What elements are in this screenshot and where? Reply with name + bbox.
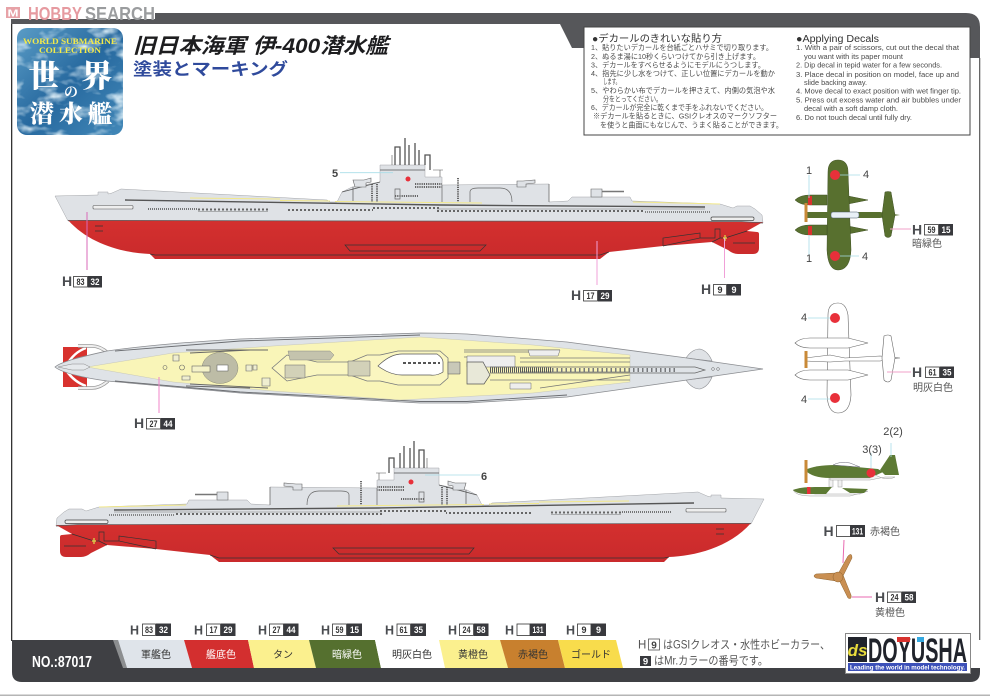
note on colour codes: 9 — [643, 656, 648, 668]
swatch: 明灰白色 — [375, 640, 445, 668]
series name in English: WORLD SUBMARINE — [23, 36, 117, 46]
English decal instructions: 3. Place decal in position on model, face up and — [796, 70, 959, 79]
callouts on floatplane: 2(2) — [883, 426, 903, 438]
colour name: 赤褐色 — [870, 526, 900, 538]
callouts on grey aircraft — [801, 312, 807, 406]
colour code H17 29: 17 — [586, 291, 594, 301]
code 83 32: 83 — [145, 625, 153, 635]
code 17 29: 29 — [224, 625, 232, 635]
swatch: 黄橙色 — [439, 640, 508, 668]
aft deck fittings — [464, 350, 630, 388]
bow planes — [686, 349, 712, 389]
code 59 15: 15 — [350, 625, 359, 635]
Japanese decal instructions: 5、やわらかい布でデカールを押さえて、内側の気泡や水 — [591, 86, 776, 95]
product number: NO.:87017 — [32, 654, 92, 671]
submarine top view — [55, 333, 763, 403]
subtitle: 塗装とマーキング — [133, 59, 288, 79]
colour code H17 29: 29 — [600, 291, 610, 301]
leader: propeller colour — [724, 238, 726, 278]
callouts on floatplane — [862, 426, 903, 456]
colour code H9 9: 9 — [731, 285, 737, 295]
callout 5 — [332, 168, 393, 180]
code 24 58 — [448, 624, 488, 638]
colour code H131: H — [824, 523, 834, 539]
series name in Japanese: 水 — [59, 101, 83, 128]
leader: deck colour — [158, 377, 160, 413]
colour code H61 35: 35 — [942, 368, 952, 378]
Japanese decal instructions: します。 — [603, 77, 620, 86]
callouts on green aircraft: 1 — [806, 253, 812, 265]
code 17 29: 17 — [210, 625, 218, 635]
code 9 9: 9 — [596, 625, 601, 635]
colour code H59 15 — [912, 222, 953, 238]
code 9 9: H — [566, 624, 575, 638]
colour code H17 29 — [571, 287, 612, 303]
English decal instructions: 1. With a pair of scissors, cut out the decal that — [796, 43, 959, 52]
Japanese decal instructions: 2、ぬるま湯に10秒くらいつけてから引き上げます。 — [591, 52, 760, 61]
code 17 29 — [194, 624, 236, 638]
code 27 44: 27 — [272, 625, 280, 635]
Doyusha logo: Leading the world in model technology. — [850, 664, 965, 672]
Japanese decal instructions: 分をとってください。 — [603, 94, 662, 104]
colour code H83 32 — [62, 273, 102, 289]
English decal instructions: slide backing away. — [804, 78, 867, 87]
callout 6: 6 — [481, 471, 487, 483]
code 27 44: 44 — [286, 625, 296, 635]
code 24 58: 24 — [462, 625, 470, 635]
series badge: World Submarine Collection — [17, 28, 123, 135]
code 61 35: 35 — [414, 625, 423, 635]
colour name: 明灰白色 — [913, 381, 953, 394]
code 17 29: H — [194, 624, 203, 638]
colour code H61 35: H — [912, 364, 922, 380]
swatch: 軍艦色 — [118, 640, 192, 668]
note on colour codes: はGSIクレオス・水性ホビーカラー、 — [663, 638, 830, 652]
swatch: タン: タン — [273, 649, 293, 661]
English decal instructions: you want with its paper mount — [804, 52, 903, 61]
colour name: 黄橙色 — [875, 606, 905, 619]
code 27 44: H — [258, 624, 267, 638]
Japanese decal instructions: を使うと曲面にもなじんで、うまく貼ることができます。 — [600, 120, 783, 130]
colour code H83 32: 83 — [76, 277, 84, 287]
swatch: 赤褐色: 赤褐色 — [518, 649, 548, 661]
Japanese decal instructions: 1、貼りたいデカールを台紙ごとハサミで切り取ります。 — [591, 43, 773, 52]
series name in English — [23, 36, 117, 55]
colour code H27 44: 44 — [164, 419, 172, 429]
note on colour codes — [638, 638, 830, 668]
Japanese decal instructions: 6、デカールが完全に乾くまで手をふれないでください。 — [591, 103, 768, 112]
code 59 15: H — [321, 624, 330, 638]
swatch: 明灰白色: 明灰白色 — [392, 648, 432, 661]
callouts on floatplane: 3(3) — [862, 444, 882, 456]
English decal instructions: decal with a soft damp cloth. — [804, 104, 898, 113]
colour name: 暗緑色 — [912, 237, 942, 250]
series name in Japanese — [28, 59, 112, 128]
Japanese decal instructions — [591, 32, 783, 130]
English decal instructions: 2. Dip decal in tepid water for a few seconds. — [796, 60, 942, 70]
page edge line — [0, 694, 990, 696]
colour code row — [130, 624, 606, 638]
hull outline — [55, 333, 763, 403]
stern centre fairing — [58, 364, 90, 370]
note on colour codes: はMr.カラーの番号です。 — [654, 654, 768, 668]
series name in Japanese: 界 — [82, 59, 112, 94]
stern planes — [63, 346, 108, 388]
swatch: 赤褐色 — [500, 640, 565, 668]
colour code H17 29: H — [571, 287, 581, 303]
code 59 15 — [321, 624, 362, 638]
submarine side view, port — [55, 138, 763, 259]
swatch: 艦底色: 艦底色 — [206, 648, 236, 661]
leader: light grey — [887, 371, 911, 373]
code 83 32: 32 — [159, 625, 168, 635]
colour code H83 32: H — [62, 273, 72, 289]
note on colour codes: 9 — [651, 640, 657, 652]
callouts on green aircraft: 4 — [863, 169, 869, 181]
colour code H61 35: 61 — [928, 368, 936, 378]
swatch: 黄橙色: 黄橙色 — [458, 648, 488, 661]
colour code H27 44: H — [134, 415, 144, 431]
colour code H24 58: 58 — [904, 592, 914, 602]
series name in Japanese: 艦 — [88, 101, 112, 128]
hinomaru — [406, 176, 410, 182]
series name in Japanese: の — [64, 86, 78, 101]
forward gun ring — [192, 352, 238, 384]
code 83 32 — [130, 624, 171, 638]
Doyusha logo — [846, 632, 970, 674]
callout 6 — [425, 471, 487, 483]
colour code H27 44: 27 — [150, 419, 158, 429]
centre rail — [490, 368, 552, 372]
colour code H131: 131 — [852, 526, 863, 536]
code 61 35: 61 — [400, 625, 408, 635]
Japanese decal instructions: ●デカールのきれいな貼り方 — [592, 32, 722, 45]
panel: decal instructions — [584, 27, 970, 135]
Japanese decal instructions: 4、指先に少し水をつけて、正しい位置にデカールを動か — [591, 69, 776, 78]
fore deck fittings — [173, 355, 270, 386]
colour code H24 58 — [875, 589, 916, 605]
callouts on green aircraft — [806, 165, 869, 265]
watermark logo: Hobby Search — [6, 4, 155, 24]
colour code H9 9: 9 — [717, 285, 723, 295]
code 24 58: 58 — [476, 625, 486, 635]
series name in Japanese: 潜 — [30, 101, 54, 128]
colour code H9 9 — [701, 281, 741, 297]
callouts on grey aircraft: 4 — [801, 312, 807, 324]
aircraft: dark green top view — [795, 160, 900, 270]
swatch: 暗緑色 — [309, 640, 381, 668]
colour code H27 44 — [134, 415, 175, 431]
callouts on green aircraft: 4 — [862, 251, 868, 263]
leader: dark green — [890, 228, 911, 230]
colour code H61 35 — [912, 364, 954, 380]
callouts on grey aircraft: 4 — [801, 394, 807, 406]
swatch: タン — [248, 640, 316, 668]
swatch: 暗緑色: 暗緑色 — [332, 648, 362, 661]
colour code H83 32: 32 — [90, 277, 100, 287]
code 24 58: H — [448, 624, 457, 638]
Doyusha logo: ds — [848, 641, 867, 660]
aircraft: floatplane side view — [793, 443, 899, 496]
swatch: 軍艦色: 軍艦色 — [141, 648, 171, 661]
series name in Japanese: 世 — [28, 59, 60, 94]
colour code H59 15: H — [912, 222, 922, 238]
code 61 35: H — [385, 624, 394, 638]
English decal instructions: ●Applying Decals — [796, 34, 879, 45]
leader: hull side colour — [86, 212, 88, 270]
swatch: 艦底色 — [184, 640, 254, 668]
colour code H24 58: H — [875, 589, 885, 605]
submarine side view, starboard — [56, 441, 764, 562]
callout 5: 5 — [332, 168, 338, 180]
watermark logo: Hobby Search: HOBBY — [28, 4, 82, 24]
English decal instructions — [796, 34, 962, 122]
code 9 9 — [566, 624, 606, 638]
colour code H24 58: 24 — [890, 592, 898, 602]
swatch: ゴールド — [558, 640, 623, 668]
English decal instructions: 6. Do not touch decal until fully dry. — [796, 113, 912, 122]
code 131: 131 — [532, 625, 544, 635]
colour code H59 15: 59 — [928, 225, 936, 235]
hinomaru — [408, 480, 414, 484]
code 9 9: 9 — [581, 625, 587, 635]
superstructure — [272, 351, 448, 385]
colour code H131 — [824, 523, 865, 539]
English decal instructions: 5. Press out excess water and air bubbles under — [796, 96, 962, 104]
deck — [87, 337, 630, 400]
aircraft: light grey underside view — [795, 303, 900, 413]
leader: propeller hub — [843, 540, 844, 563]
note on colour codes: H — [638, 640, 646, 652]
title: 旧日本海軍 伊-400潜水艦 — [133, 35, 391, 58]
code 61 35 — [385, 624, 426, 638]
code 27 44 — [258, 624, 298, 638]
Japanese decal instructions: ※デカールを貼るときに、GSIクレオスのマークソフター — [593, 112, 777, 120]
code 131: H — [505, 624, 514, 638]
code 59 15: 59 — [336, 625, 344, 635]
swatch: ゴールド: ゴールド — [571, 648, 611, 661]
callouts on green aircraft: 1 — [806, 165, 812, 177]
colour code H59 15: 15 — [942, 225, 950, 235]
watermark logo: Hobby Search: M — [8, 8, 18, 20]
code 131 — [505, 624, 546, 638]
colour swatch band — [118, 640, 623, 668]
English decal instructions: 4. Move decal to exact position with wet finger tip. — [796, 86, 961, 96]
watermark logo: Hobby Search: SEARCH — [85, 4, 155, 24]
colour code H9 9: H — [701, 281, 711, 297]
series name in English: COLLECTION — [39, 45, 102, 55]
code 83 32: H — [130, 624, 139, 638]
leader: hull bottom colour — [596, 241, 598, 285]
leader: propeller blades — [852, 596, 872, 598]
icon: propeller — [814, 554, 852, 599]
Japanese decal instructions: 3、デカールをすべらせるようにモデルにうつします。 — [591, 60, 765, 70]
